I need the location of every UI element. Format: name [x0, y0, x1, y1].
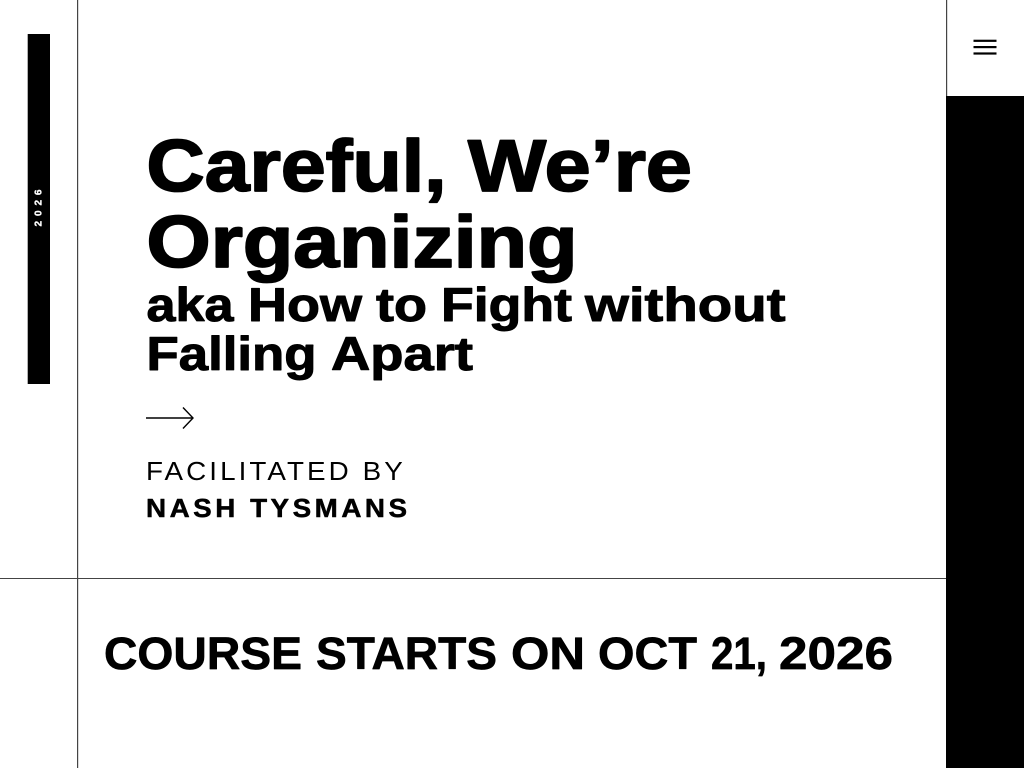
- course start date: ON: [511, 628, 585, 679]
- subtitle: Apart: [331, 327, 473, 380]
- course start date: 21,: [711, 628, 767, 679]
- title: Careful,: [146, 126, 446, 207]
- course start date: 2026: [779, 628, 893, 679]
- subtitle: Falling: [146, 327, 316, 380]
- panel: black right sidebar: [946, 96, 1024, 768]
- icon: hamburger menu: [974, 40, 996, 55]
- subtitle: to: [376, 278, 427, 331]
- facilitator text: NASH TYSMANS: [146, 494, 407, 523]
- title: Organizing: [146, 202, 578, 283]
- icon: right arrow: [146, 408, 193, 428]
- subtitle: How: [248, 278, 362, 331]
- facilitator text: FACILITATED BY: [146, 457, 403, 486]
- title: We’re: [468, 126, 692, 207]
- subtitle: [146, 278, 786, 380]
- panel: black year bar: [28, 34, 50, 384]
- course start date: COURSE: [104, 628, 302, 679]
- subtitle: without: [584, 278, 786, 331]
- course start date: STARTS: [316, 628, 497, 679]
- subtitle: Fight: [441, 278, 572, 331]
- facilitator text: [146, 457, 407, 523]
- subtitle: aka: [146, 278, 234, 331]
- year label: 2026: [34, 189, 44, 226]
- title: [146, 126, 692, 283]
- course start date: OCT: [598, 628, 697, 679]
